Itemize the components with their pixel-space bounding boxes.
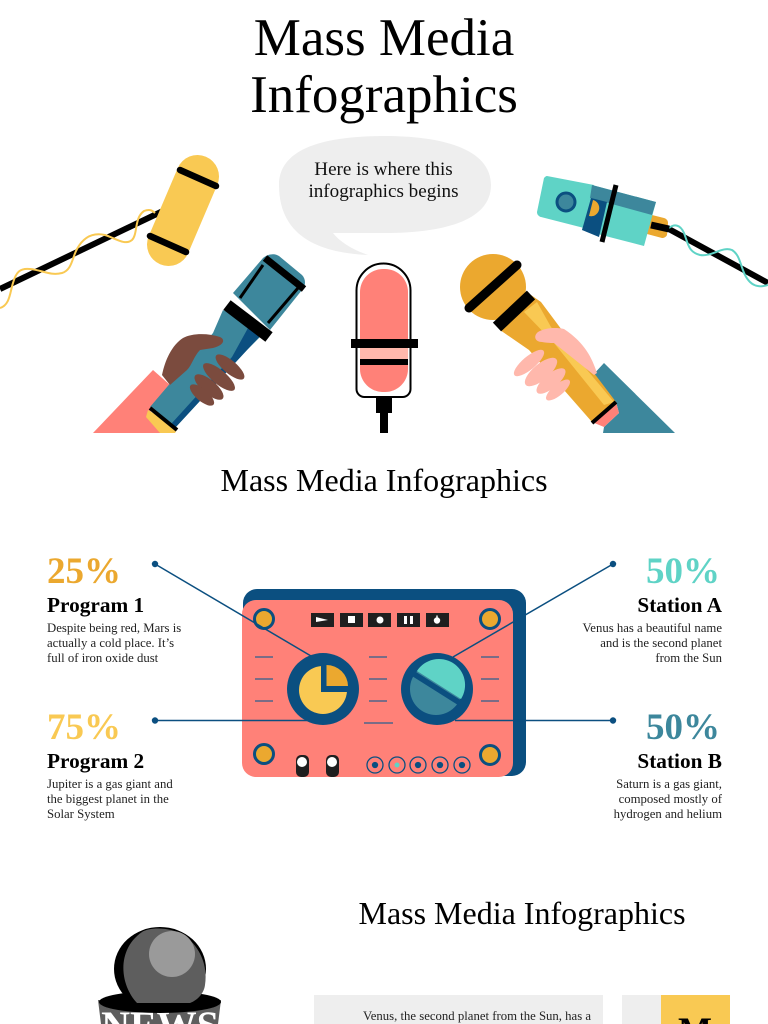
heading: section three: Mass Media Infographics bbox=[358, 895, 686, 931]
text block: Station A: Venus has a beautiful name bbox=[582, 621, 722, 635]
text block: Program 2: Program 2 bbox=[47, 749, 144, 773]
text block: Station A: and is the second planet bbox=[600, 636, 722, 650]
text block: Station A bbox=[582, 551, 723, 665]
text block: Station B: Saturn is a gas giant, bbox=[616, 777, 722, 791]
title: Mass Media bbox=[254, 9, 514, 67]
console knobs bbox=[367, 757, 470, 773]
title bbox=[250, 9, 518, 124]
speech bubble: infographics begins bbox=[308, 181, 459, 202]
text block: Program 2: 75% bbox=[47, 707, 121, 748]
speech bubble bbox=[279, 136, 491, 255]
text block: Program 2: the biggest planet in the bbox=[47, 792, 169, 806]
text block: Program 1: full of iron oxide dust bbox=[47, 651, 159, 665]
console body bbox=[242, 589, 526, 777]
panel: description text bbox=[314, 995, 603, 1024]
console transport buttons bbox=[311, 613, 449, 627]
mixing console bbox=[152, 561, 616, 777]
text block: Station A: from the Sun bbox=[655, 651, 723, 665]
text block: Station A: Station A bbox=[637, 593, 723, 617]
console corner screws bbox=[254, 610, 500, 764]
left dial: pie chart 25 / 75 bbox=[287, 653, 359, 725]
icon: yellow handheld microphone with hand bbox=[460, 254, 675, 433]
text block: Station B bbox=[614, 707, 723, 821]
icon: grey news microphone bbox=[98, 927, 221, 1024]
text block: Program 2 bbox=[47, 707, 173, 821]
icon: centre studio microphone bbox=[351, 264, 418, 433]
heading: section two: Mass Media Infographics bbox=[220, 462, 548, 498]
speech bubble: Here is where this bbox=[314, 159, 453, 180]
text block: Program 1: actually a cold place. It’s bbox=[47, 636, 174, 650]
icon: teal boom microphone bbox=[537, 176, 768, 286]
right dial: split 50 / 50 bbox=[401, 653, 473, 725]
text block: Station A: 50% bbox=[646, 551, 720, 592]
text block: Program 1 bbox=[47, 551, 181, 665]
console sliders bbox=[296, 755, 339, 777]
text block: Station B: Station B bbox=[637, 749, 722, 773]
title: Infographics bbox=[250, 66, 518, 124]
text block: Station B: hydrogen and helium bbox=[614, 807, 722, 821]
console tick marks bbox=[255, 657, 499, 723]
text block: Program 2: Jupiter is a gas giant and bbox=[47, 777, 173, 791]
text block: Program 1: Despite being red, Mars is bbox=[47, 621, 181, 635]
text block: Program 1: 25% bbox=[47, 551, 121, 592]
connector lines bbox=[152, 561, 616, 724]
text block: Program 2: Solar System bbox=[47, 807, 115, 821]
icon: yellow boom microphone bbox=[0, 170, 216, 308]
panel: letter tile bbox=[622, 995, 730, 1024]
icon: teal handheld microphone with hand bbox=[93, 254, 305, 433]
text block: Program 1: Program 1 bbox=[47, 593, 144, 617]
text block: Station B: 50% bbox=[646, 707, 720, 748]
text block: Station B: composed mostly of bbox=[619, 792, 723, 806]
panel: description text: Venus, the second planet from the Sun, has a bbox=[363, 1009, 591, 1023]
